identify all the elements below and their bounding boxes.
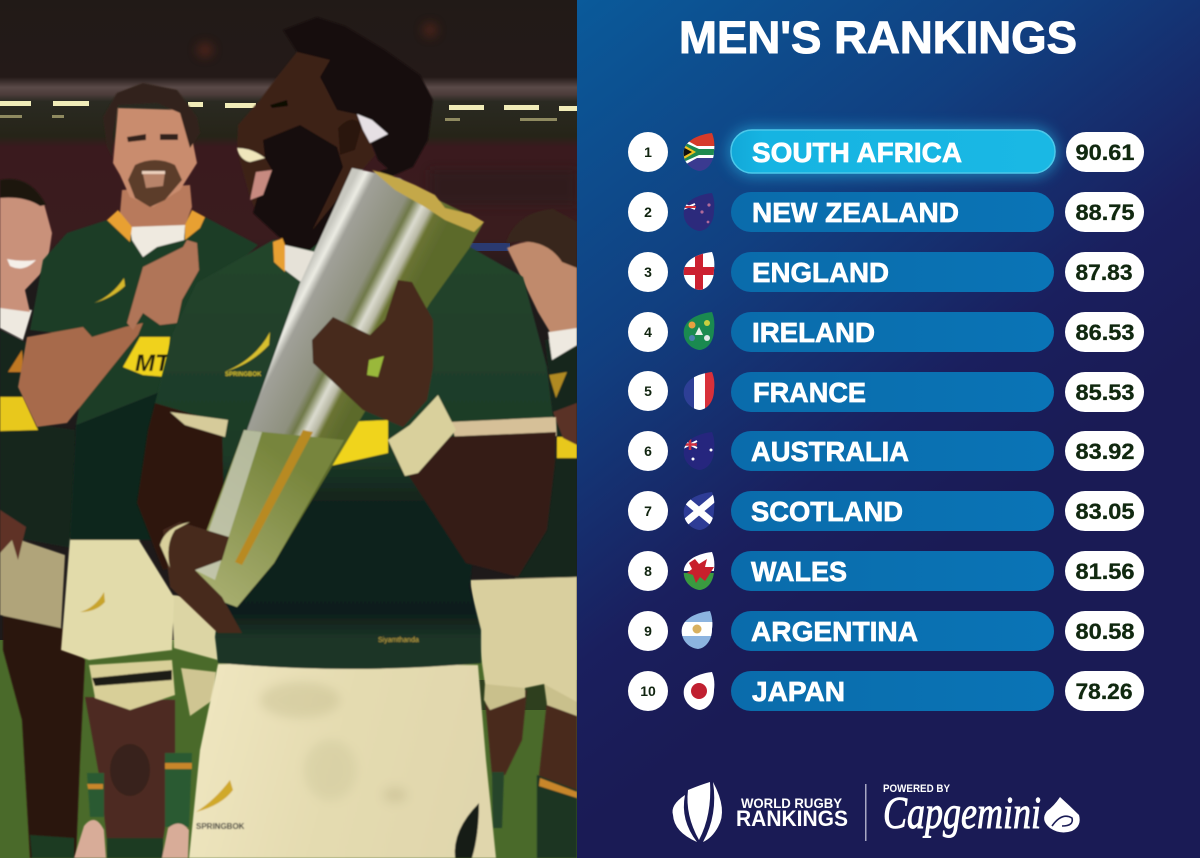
main player hair	[283, 17, 433, 175]
rank 2	[628, 192, 668, 232]
right player hand	[553, 403, 577, 445]
divider	[865, 784, 866, 841]
right player collar	[548, 326, 577, 360]
rank 9: 9	[644, 623, 652, 639]
row 1	[628, 127, 1144, 177]
main player upper hand	[312, 280, 433, 427]
second player shorts	[61, 537, 174, 660]
second player beard	[128, 160, 182, 207]
second player collar orange	[107, 210, 205, 242]
second knee strapping	[181, 668, 216, 716]
photo: Springboks celebrating with trophy	[0, 0, 577, 858]
second player legs	[85, 697, 175, 840]
right player legs	[485, 690, 527, 775]
shorts badge	[196, 780, 233, 812]
score pill: 90.61	[1076, 140, 1134, 165]
icon: World Rugby logo	[672, 782, 722, 842]
score pill: 78.26	[1076, 679, 1132, 704]
name: IRELAND	[752, 317, 875, 348]
World Rugby text: WORLD RUGBY	[741, 795, 843, 811]
rank 6	[628, 431, 668, 471]
main player ear	[338, 120, 362, 155]
crowd tint	[197, 23, 577, 205]
main player	[137, 17, 557, 858]
flag: Argentina	[677, 608, 717, 652]
main player left arm	[137, 403, 232, 570]
knee shadow	[110, 744, 150, 796]
stadium lights	[0, 101, 577, 111]
rank 4	[628, 312, 668, 352]
icon: Capgemini spade	[1044, 797, 1080, 832]
second player sponsor	[123, 337, 170, 377]
second player head	[113, 108, 197, 207]
rank 7	[628, 491, 668, 531]
second player jersey sponsor text: MT	[135, 350, 172, 377]
footer logos	[672, 782, 1080, 842]
row 4	[628, 309, 1144, 353]
sleeve trim right	[450, 417, 557, 437]
main player beard	[253, 125, 343, 238]
row 3	[628, 249, 1144, 293]
second player jersey	[30, 217, 258, 540]
bar: England	[731, 252, 1054, 292]
score pill: 85.53	[1076, 380, 1134, 405]
second player badge	[94, 278, 125, 303]
main player eye	[270, 100, 288, 108]
score pill	[1065, 372, 1144, 412]
main player face	[237, 52, 375, 237]
score pill	[1065, 431, 1144, 471]
right player sponsor	[557, 437, 577, 458]
bar: New Zealand	[731, 192, 1054, 232]
wrist tape	[388, 395, 456, 476]
score pill	[1065, 312, 1144, 352]
right player logo	[549, 372, 567, 398]
main player teeth	[237, 148, 265, 162]
rank 10	[628, 671, 668, 711]
right player	[470, 209, 577, 858]
score pill: 87.83	[1076, 260, 1132, 285]
main player collar white	[285, 245, 315, 285]
secondary lights	[0, 115, 557, 121]
far left shorts	[0, 533, 65, 628]
score pill	[1065, 551, 1144, 591]
main player mouth	[250, 170, 272, 200]
score pill: 83.05	[1076, 499, 1134, 524]
panel: rankings	[577, 0, 1200, 858]
rank 7: 7	[644, 503, 652, 519]
flag: Scotland	[679, 489, 719, 533]
second player chin	[143, 172, 165, 188]
Rankings text: RANKINGS	[736, 806, 848, 831]
stadium background	[0, 0, 577, 700]
bar: France	[731, 372, 1054, 412]
row 10	[628, 669, 1144, 713]
far left hand	[0, 510, 26, 560]
second player mouth	[142, 171, 165, 174]
bar: Scotland	[731, 491, 1054, 531]
bar: Japan	[731, 671, 1054, 711]
name: AUSTRALIA	[751, 436, 909, 467]
rank 2: 2	[644, 204, 652, 220]
flag: France	[679, 369, 719, 413]
far left hair	[0, 179, 46, 206]
right player jersey	[515, 335, 577, 578]
second player hair	[103, 83, 200, 157]
second player arm	[18, 323, 143, 427]
row 2	[628, 190, 1144, 234]
row 8	[628, 549, 1144, 593]
row 9	[628, 608, 1144, 652]
score pill	[1065, 671, 1144, 711]
far left collar	[0, 307, 32, 340]
far left jersey	[0, 330, 75, 548]
main player right arm	[407, 432, 556, 577]
second player neck	[120, 185, 192, 230]
score pill: 80.58	[1076, 619, 1134, 644]
score pill: 86.53	[1076, 320, 1134, 345]
main player collar orange	[273, 237, 285, 272]
name: SCOTLAND	[751, 496, 903, 527]
second player boots	[74, 820, 189, 858]
shorts dirt	[260, 682, 407, 803]
far left smile	[7, 259, 36, 268]
name: NEW ZEALAND	[752, 197, 959, 228]
second player shorts badge	[80, 592, 105, 612]
bar: South Africa	[731, 130, 1055, 173]
score pill: 81.56	[1076, 559, 1134, 584]
second player knee strapping	[89, 660, 175, 710]
name: SOUTH AFRICA	[752, 137, 962, 168]
flag: Japan	[679, 669, 719, 713]
right player face	[507, 241, 577, 332]
second player	[18, 83, 258, 858]
far left legs	[3, 615, 85, 858]
second leg shorts	[172, 595, 222, 660]
rank 8: 8	[644, 563, 652, 579]
rank 4: 4	[644, 324, 652, 340]
rank 8	[628, 551, 668, 591]
sock stripes	[539, 778, 577, 798]
grass	[0, 640, 577, 858]
right player hair	[507, 209, 577, 268]
second player lower jersey shading	[70, 380, 230, 540]
rank 5: 5	[644, 383, 652, 399]
score pill	[1065, 491, 1144, 531]
name: ENGLAND	[752, 257, 889, 288]
asics logo	[455, 803, 479, 858]
rank 5	[628, 371, 668, 411]
bar: Ireland	[731, 312, 1054, 352]
rank 9	[628, 611, 668, 651]
flag: England	[679, 249, 719, 293]
row 5	[628, 369, 1144, 413]
score pill	[1066, 132, 1144, 172]
powered by: POWERED BY	[883, 783, 951, 795]
score pill	[1065, 192, 1144, 232]
rank 3	[628, 252, 668, 292]
far left sponsor	[0, 397, 38, 431]
main player neck	[270, 165, 400, 250]
trophy rim	[372, 170, 484, 232]
pitch-side board	[470, 243, 510, 251]
panel background	[577, 0, 1200, 858]
trophy body	[192, 168, 484, 607]
main player sponsor	[326, 420, 388, 467]
rank 10: 10	[640, 683, 656, 699]
name: FRANCE	[753, 377, 866, 408]
bar glow	[728, 127, 1058, 177]
score pill: 83.92	[1076, 439, 1134, 464]
trophy silver streak	[195, 430, 262, 580]
name: ARGENTINA	[751, 616, 918, 647]
far left sock	[30, 835, 74, 858]
rank 3: 3	[644, 264, 652, 280]
bar: Argentina	[731, 611, 1054, 651]
bar: Wales	[731, 551, 1054, 591]
main player jersey badge	[224, 332, 270, 372]
score pill	[1065, 611, 1144, 651]
main player shorts	[189, 664, 496, 858]
row 6	[628, 429, 1144, 473]
flag: Wales	[679, 549, 719, 593]
row 7	[628, 489, 1144, 533]
second player eyes	[127, 134, 178, 142]
jersey name caption: Siyamthanda	[378, 637, 419, 644]
upper grass right	[478, 680, 577, 710]
name: JAPAN	[752, 676, 845, 707]
second player socks	[87, 753, 192, 827]
main player lower hand	[163, 522, 242, 633]
sock stripe	[87, 763, 192, 789]
flag: Australia	[679, 429, 719, 473]
flag: South Africa	[679, 130, 719, 174]
rank 6: 6	[644, 443, 652, 459]
bar: Australia	[731, 431, 1054, 471]
title: MEN'S RANKINGS	[679, 12, 1077, 63]
rank 1: 1	[644, 144, 652, 160]
far left player	[0, 179, 85, 858]
score pill	[1065, 252, 1144, 292]
trophy gold stripe	[235, 430, 313, 565]
right player shorts	[470, 577, 577, 702]
Capgemini wordmark: Capgemini	[883, 787, 1041, 838]
second player sock lower	[107, 838, 163, 858]
second player collar white	[130, 225, 185, 257]
main player badge caption: SPRINGBOK	[225, 372, 262, 378]
rank 1	[628, 132, 668, 172]
shorts caption: SPRINGBOK	[196, 822, 245, 831]
sleeve trim left	[170, 412, 228, 437]
trophy lower section	[192, 430, 344, 607]
far left logo	[8, 350, 24, 372]
flag: New Zealand	[679, 190, 719, 234]
right player tape	[484, 683, 577, 716]
flag: Ireland	[679, 309, 719, 353]
wristband	[160, 522, 190, 568]
name: WALES	[751, 556, 847, 587]
score pill: 88.75	[1076, 200, 1134, 225]
ring	[367, 356, 384, 377]
main player jersey	[155, 230, 553, 669]
far left neck and face	[0, 196, 52, 312]
right player socks	[492, 772, 504, 828]
second player hands	[127, 240, 199, 330]
main player head tape	[357, 114, 388, 143]
